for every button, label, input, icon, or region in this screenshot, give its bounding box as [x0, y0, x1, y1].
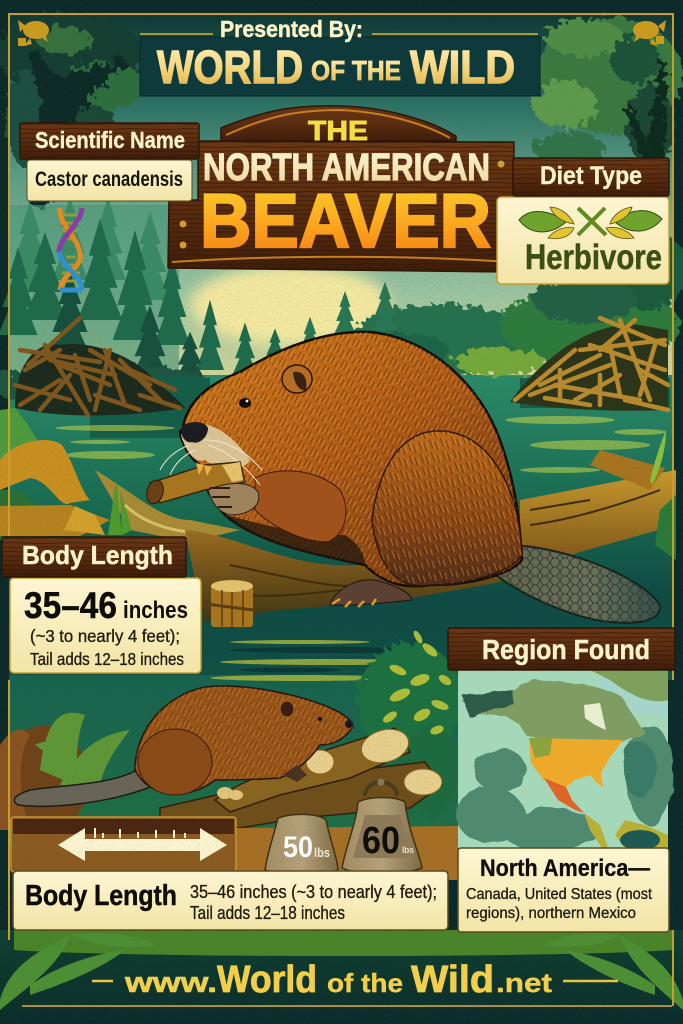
body length value box: (~3 to nearly 4 feet); [30, 626, 180, 646]
corner emblem: right [633, 20, 666, 46]
website suffix: .net [496, 968, 552, 998]
range map [456, 670, 674, 852]
main log under the beaver [185, 430, 676, 622]
beaver tail [488, 545, 660, 623]
beaver ear [282, 365, 312, 393]
beaver face [160, 398, 262, 485]
body length value box: 35–46 [24, 585, 117, 626]
small beaver logs [160, 724, 442, 828]
map: Canada [461, 680, 645, 743]
small beaver haunch [138, 729, 212, 795]
map: South America [620, 830, 660, 850]
region found value box [458, 848, 669, 932]
scientific name value: Castor canadensis [35, 168, 183, 191]
small beaver [14, 686, 353, 806]
diet type header: Diet Type [540, 162, 642, 190]
weight: 60 lbs: lbs [402, 845, 414, 855]
website words: of the: of the [327, 968, 403, 998]
forest: pine trees and far tree line [0, 196, 683, 407]
footer foliage [0, 930, 683, 1010]
title line: beaver: BEAVER [200, 179, 491, 264]
icon: DNA helix [59, 208, 82, 290]
diet type header [513, 158, 669, 196]
map: Hudson Bay [584, 703, 606, 730]
gnawed stick [144, 462, 245, 506]
presented by label: Presented By: [220, 16, 363, 42]
body length value box: inches [123, 597, 188, 624]
weight: 60 lbs [342, 778, 422, 874]
title line: the: THE [308, 115, 368, 146]
title sign [168, 106, 514, 272]
panel: diet type [497, 158, 669, 284]
footer base line [22, 1005, 672, 1007]
panel: body length bar [13, 871, 448, 930]
map: Mexico [544, 778, 584, 813]
website word: world: World [217, 959, 317, 1001]
website prefix: www. [124, 967, 217, 999]
body length header: Body Length [22, 540, 173, 570]
large beaver [144, 332, 660, 623]
presenter name: of the: OF THE [311, 55, 401, 86]
meadow leaves [381, 629, 453, 736]
panel: body length bar: Body Length [25, 880, 177, 912]
beaver forearm [255, 471, 346, 542]
map: United States [529, 738, 623, 787]
region found value box: North America— [480, 855, 650, 882]
diet type value box [497, 197, 669, 284]
logs and plants on the left bank [0, 408, 240, 542]
small beaver head details [280, 701, 353, 782]
presenter header [140, 16, 540, 96]
body length value box [10, 578, 201, 673]
measuring log strip [11, 817, 458, 880]
map: Northwest green [529, 738, 552, 758]
sign board [168, 141, 514, 272]
beaver body [180, 332, 522, 586]
sign arch [221, 106, 456, 141]
small beaver tail [14, 768, 155, 806]
weight: 50 lbs: 50 [283, 831, 313, 864]
panel: scientific name [20, 123, 199, 290]
presenter rules [140, 33, 538, 35]
panel: body length callout [2, 537, 201, 673]
map: north Atlantic [600, 670, 668, 715]
panel: body length bar: Tail adds 12–18 inches [190, 903, 345, 923]
region found value box: regions), northern Mexico [466, 905, 636, 922]
map: Central America [584, 813, 668, 848]
weight: 60 lbs: 60 [362, 820, 400, 862]
body length header [2, 537, 186, 577]
corner emblem: left [18, 20, 49, 46]
panel: region found [448, 628, 675, 932]
website word: wild: Wild [411, 959, 494, 1001]
scientific name header [20, 123, 199, 159]
scientific name value [27, 160, 192, 201]
forest: upper right tree [533, 17, 682, 168]
icon: leaves [519, 207, 662, 239]
region found value box: Canada, United States (most [466, 886, 653, 903]
presenter name: wild: WILD [410, 41, 515, 93]
map: ocean landmass shading [456, 725, 674, 852]
beaver dam: left [15, 318, 185, 416]
small beaver body [135, 686, 353, 794]
beaver hind leg [372, 431, 522, 586]
pond highlights [55, 378, 670, 681]
cut stump [206, 580, 253, 627]
title line: north american: NORTH AMERICAN [203, 147, 490, 189]
lower meadow plants [0, 629, 462, 830]
body length value box: Tail adds 12–18 inches [30, 649, 184, 669]
footer rules [92, 980, 618, 982]
length arrow with ruler [58, 828, 227, 861]
presenter banner [140, 37, 540, 96]
footer website [22, 959, 672, 1006]
scientific name header: Scientific Name [35, 127, 185, 153]
beaver front paw [208, 484, 259, 515]
region found header [448, 628, 675, 670]
weight: 50 lbs [265, 814, 338, 874]
panel: body length bar: 35–46 inches (~3 to nearly 4 feet); [190, 882, 437, 902]
presenter name: world: WORLD [157, 41, 303, 93]
weight: 50 lbs: lbs [314, 845, 330, 860]
map: Greenland [590, 670, 668, 701]
forest: upper left tree [0, 13, 143, 208]
beaver hind foot [330, 580, 412, 607]
map: Alaska [462, 688, 515, 718]
beaver dam: right [510, 318, 668, 411]
region found header: Region Found [482, 634, 650, 665]
